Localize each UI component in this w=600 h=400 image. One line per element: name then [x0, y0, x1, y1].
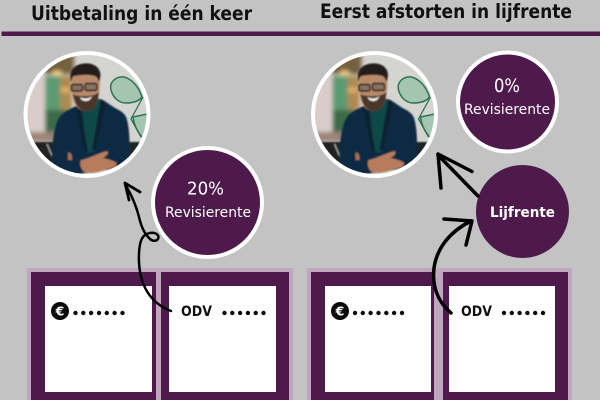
circle: 0% revisierente — [458, 52, 557, 152]
circle: 0% revisierente: Revisierente — [464, 102, 550, 118]
header divider — [2, 32, 600, 36]
arrow: ODV to man, with loop — [125, 183, 171, 311]
circle: 0% revisierente: 0% — [494, 76, 520, 97]
panel: left assets — [27, 268, 293, 400]
circle: Lijfrente — [476, 165, 569, 258]
icon: euro left — [51, 302, 69, 320]
dots: euro amount right — [353, 311, 404, 315]
label: ODV left: ODV — [181, 304, 212, 320]
icon: euro right — [331, 302, 349, 320]
circle: 20% revisierente — [153, 148, 262, 257]
icon: euro right: € — [335, 304, 344, 318]
photo: man left — [20, 50, 155, 180]
dots: ODV amount left — [222, 311, 266, 315]
panel: right assets — [307, 268, 572, 400]
icon: euro left: € — [55, 304, 64, 318]
circle: 20% revisierente: 20% — [187, 178, 224, 200]
dots: ODV amount right — [502, 311, 545, 315]
circle: 20% revisierente: Revisierente — [165, 205, 251, 221]
dots: euro amount left — [73, 311, 125, 315]
arrow: ODV to Lijfrente — [434, 219, 472, 313]
heading: Uitbetaling in één keer: Uitbetaling in één keer — [31, 2, 252, 25]
arrow: Lijfrente to man — [438, 154, 478, 196]
heading: Eerst afstorten in lijfrente: Eerst afstorten in lijfrente — [320, 0, 572, 23]
circle: Lijfrente: Lijfrente — [490, 205, 555, 221]
label: ODV right: ODV — [461, 304, 492, 320]
photo: man right — [308, 50, 442, 180]
